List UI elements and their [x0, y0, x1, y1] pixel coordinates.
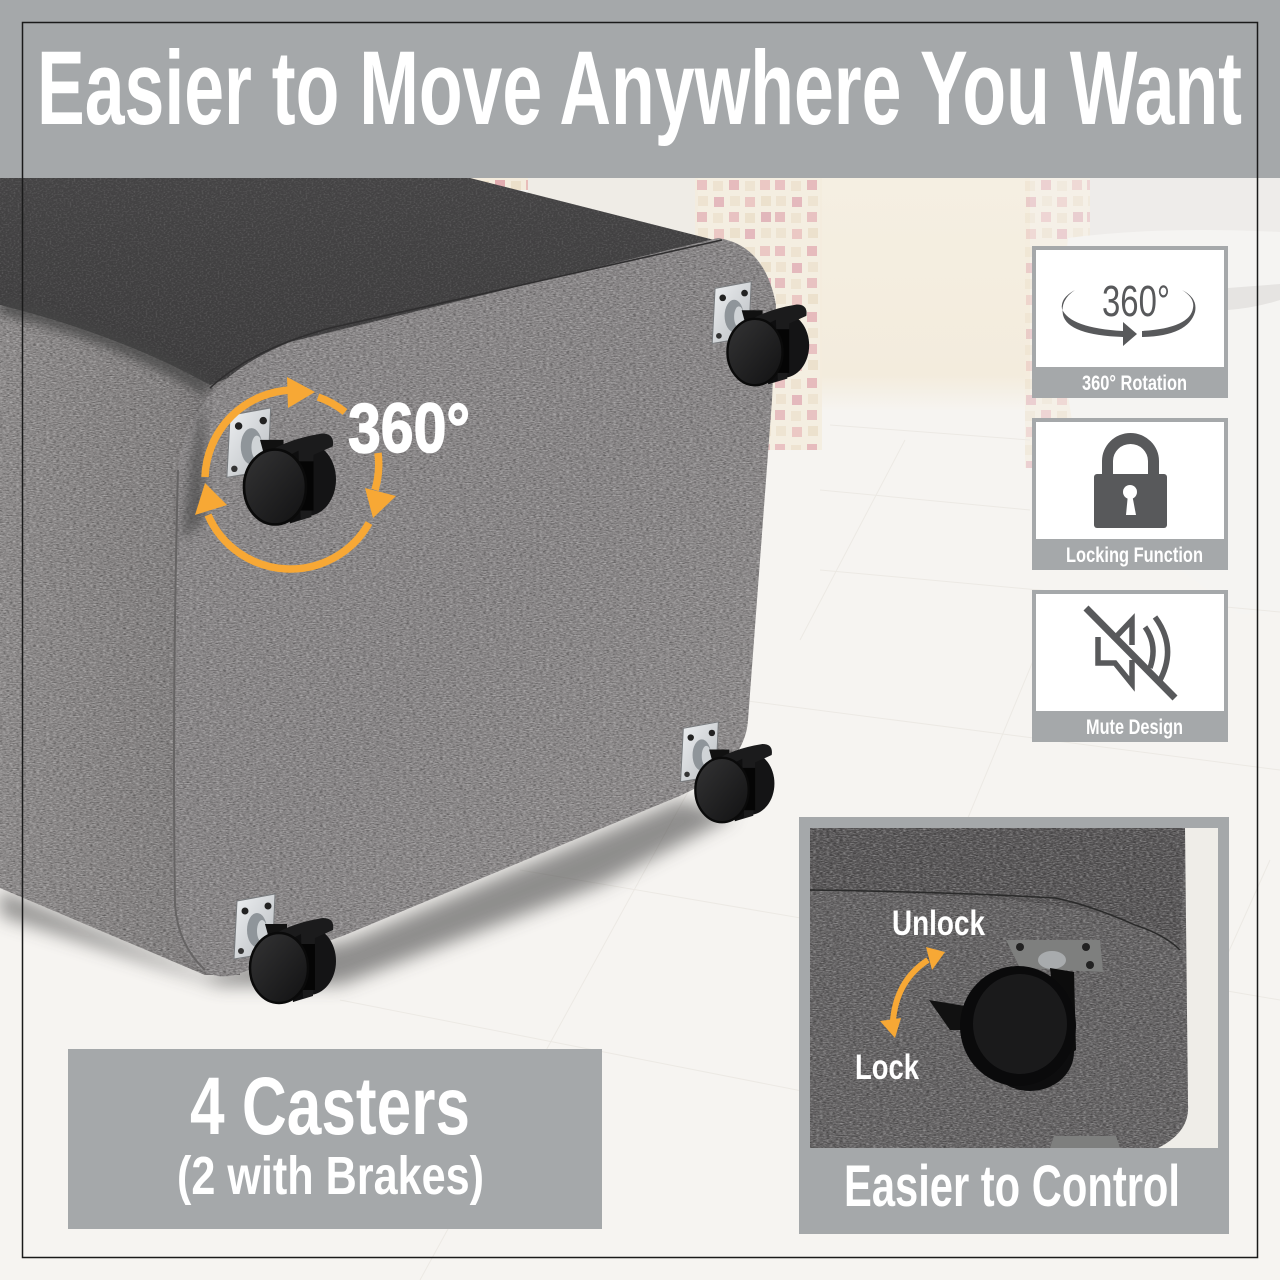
furniture shadow on floor	[0, 800, 735, 985]
card label: Locking Function	[1066, 544, 1203, 567]
brakes note: (2 with Brakes)	[177, 1146, 484, 1206]
ottoman side face	[0, 290, 240, 975]
card label: 360° Rotation	[1082, 372, 1187, 395]
icon: muted speaker	[1086, 608, 1175, 698]
label: 360 degrees: 360°	[348, 389, 470, 467]
panel: easier to control	[799, 817, 1229, 1234]
caster: front right	[681, 722, 774, 822]
caster: front left	[234, 894, 336, 1003]
label: unlock: Unlock	[892, 904, 985, 943]
rotation arrows ring	[195, 377, 396, 569]
icon: rotation arrow	[1062, 277, 1195, 346]
panel: 4 casters	[68, 1049, 602, 1229]
title banner	[0, 0, 1280, 178]
caster: rear right	[712, 282, 809, 385]
icon: rotation arrow: 360°	[1102, 277, 1170, 326]
ottoman top face	[0, 178, 738, 385]
ottoman front face	[172, 238, 776, 976]
caster count heading: 4 Casters	[190, 1061, 470, 1152]
arrow: lock and unlock	[880, 947, 945, 1038]
icon: padlock	[1094, 433, 1167, 528]
feature card: locking function	[1032, 418, 1228, 570]
ottoman: storage bench	[0, 178, 776, 976]
inset photo: caster close-up	[810, 828, 1188, 1148]
label: lock: Lock	[855, 1048, 919, 1087]
feature card: mute design	[1032, 590, 1228, 742]
card label: Mute Design	[1086, 716, 1183, 739]
caster: rear left with 360 marker	[227, 408, 336, 524]
feature card: 360 rotation	[1032, 246, 1228, 398]
